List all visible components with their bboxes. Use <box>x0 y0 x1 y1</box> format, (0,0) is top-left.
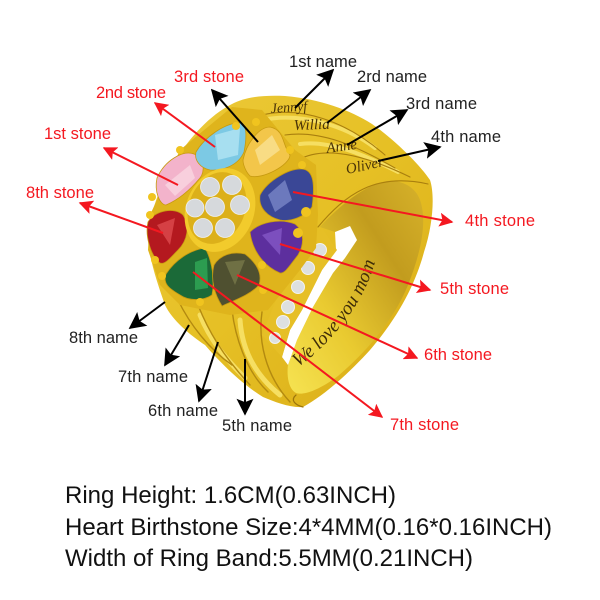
engraved names: Anne <box>324 137 358 157</box>
head: gold base <box>148 107 318 315</box>
engraved names: Willia <box>294 117 330 134</box>
stone labels: 7th stone <box>390 416 459 434</box>
specification text <box>65 482 552 572</box>
ring illustration: We love you mom <box>292 260 375 365</box>
inscription <box>298 232 381 367</box>
stone 5 purple <box>250 221 303 273</box>
ring illustration <box>146 96 433 408</box>
centre oval setting <box>172 157 268 263</box>
stone 2 blue <box>196 123 246 170</box>
red arrows <box>80 103 452 417</box>
engraved names: Oliver <box>345 154 385 178</box>
stone labels: 4th stone <box>465 212 535 230</box>
name labels: 3rd name <box>406 95 477 113</box>
stone 1 pink <box>156 153 203 205</box>
stone labels: 1st stone <box>44 125 111 143</box>
stone labels: 3rd stone <box>174 68 244 86</box>
name labels: 4th name <box>431 128 501 146</box>
name labels: 6th name <box>148 402 218 420</box>
specification text: Ring Height: 1.6CM(0.63INCH) <box>65 482 396 509</box>
black arrows <box>130 70 440 414</box>
ring outer body <box>148 96 433 407</box>
stone labels <box>26 68 535 434</box>
engraved names: Jennyf <box>270 99 310 117</box>
specification text: Heart Birthstone Size:4*4MM(0.16*0.16INCH) <box>65 514 552 541</box>
name labels: 7th name <box>118 368 188 386</box>
stone 6 olive <box>213 253 260 306</box>
prongs <box>146 118 311 306</box>
name labels: 1st name <box>289 53 357 71</box>
specification text: Width of Ring Band:5.5MM(0.21INCH) <box>65 545 473 572</box>
name labels: 8th name <box>69 329 138 347</box>
ring inner band <box>288 181 423 394</box>
stone labels: 6th stone <box>424 346 492 364</box>
engraved names <box>270 99 385 178</box>
stone labels: 8th stone <box>26 184 94 202</box>
name labels <box>69 53 501 435</box>
front face with grooves <box>178 112 428 407</box>
stone 8 red <box>147 211 187 263</box>
open gap behind the pave strip <box>282 226 357 365</box>
stone labels: 5th stone <box>440 280 509 298</box>
stone 4 navy <box>260 169 313 220</box>
stones <box>147 123 313 306</box>
stone 3 yellow <box>243 127 290 177</box>
stone 7 green <box>165 248 213 300</box>
name labels: 5th name <box>222 417 292 435</box>
stone labels: 2nd stone <box>96 84 166 102</box>
name labels: 2rd name <box>357 68 427 86</box>
pave diamond strip <box>262 228 337 357</box>
